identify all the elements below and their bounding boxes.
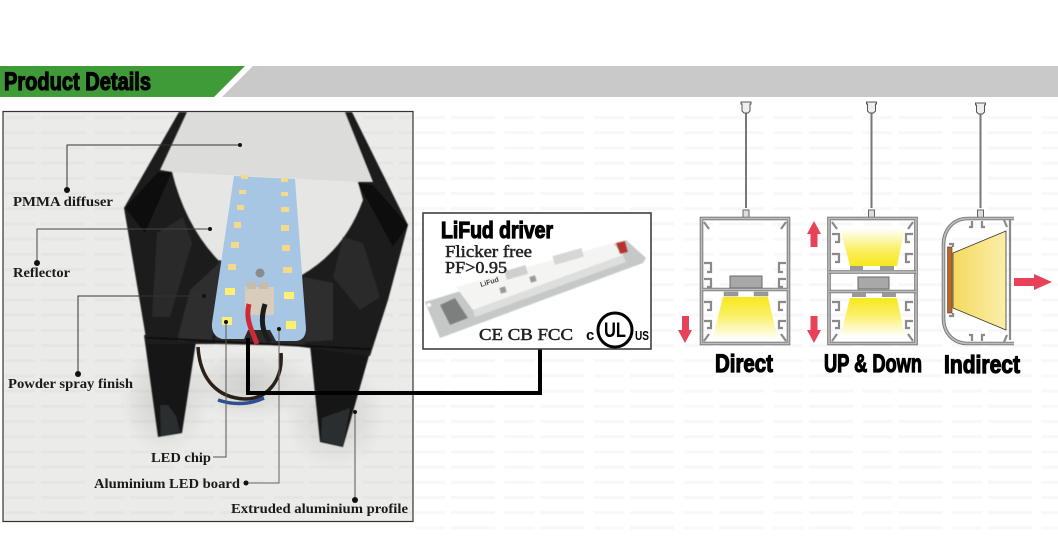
photo frame xyxy=(3,112,413,522)
LED chips xyxy=(222,175,296,329)
light beams xyxy=(840,228,905,266)
callout: PMMA diffuser xyxy=(13,143,242,209)
driver and LEDs xyxy=(858,277,889,289)
icon: pendant cable xyxy=(741,102,751,218)
callout: PMMA diffuser: PMMA diffuser xyxy=(13,194,113,209)
callout: Extruded aluminium profile: Extruded aluminium profile xyxy=(231,501,408,516)
callout: Powder spray finish xyxy=(8,294,206,391)
label: Direct xyxy=(715,350,774,378)
driver and LEDs xyxy=(730,276,762,288)
panel: LiFud driver xyxy=(423,213,651,349)
driver heading: LiFud driver xyxy=(441,217,553,243)
icon: UL mark xyxy=(586,313,649,347)
diagram: Indirect xyxy=(944,103,1052,379)
grey band xyxy=(222,66,1058,97)
diagram: Direct xyxy=(678,102,788,378)
cable loop xyxy=(198,347,281,399)
callout: Aluminium LED board: Aluminium LED board xyxy=(94,476,241,491)
LED board xyxy=(212,176,306,341)
photo background xyxy=(3,111,413,521)
label: Indirect xyxy=(944,351,1021,379)
callout: Reflector xyxy=(13,227,212,280)
profile cross-section xyxy=(829,218,916,344)
callout: Extruded aluminium profile xyxy=(231,410,408,516)
callout: Powder spray finish: Powder spray finish xyxy=(8,376,134,391)
arrow: down xyxy=(807,316,821,343)
arrow: right xyxy=(1014,274,1052,290)
icon: pendant cable xyxy=(976,103,986,218)
label: UP & Down xyxy=(824,350,922,378)
arrow: down xyxy=(678,316,692,343)
arrow: up xyxy=(807,221,821,247)
title: Product Details xyxy=(4,68,151,96)
panel: product photo with callouts xyxy=(3,111,413,522)
LED board xyxy=(948,247,952,313)
icon: UL mark: US xyxy=(635,328,649,343)
driver unit xyxy=(425,240,646,338)
callout: Aluminium LED board xyxy=(94,327,281,491)
header banner xyxy=(0,66,1058,97)
driver specs: Flicker free xyxy=(445,242,532,261)
light beam xyxy=(953,231,1006,330)
light beam xyxy=(712,297,778,340)
black aluminium profile body xyxy=(124,112,408,447)
connector and wires xyxy=(245,268,274,344)
panel: LiFud driver: PF>0.95 xyxy=(445,258,507,277)
connector line from board to driver xyxy=(248,338,540,393)
callout: Reflector: Reflector xyxy=(13,265,70,280)
icon: UL mark: c xyxy=(586,327,594,344)
callout: LED chip: LED chip xyxy=(151,450,211,465)
icon: pendant cable xyxy=(866,102,876,218)
green title band xyxy=(0,66,245,97)
small brand mark: LiFud xyxy=(480,277,500,289)
diagram: UP & Down xyxy=(807,102,922,378)
reflector xyxy=(172,172,363,275)
PMMA diffuser xyxy=(158,112,373,185)
icon: UL mark: UL xyxy=(604,319,626,342)
curved profile xyxy=(944,218,1014,344)
profile cross-section xyxy=(702,218,788,344)
callout: LED chip xyxy=(151,320,228,465)
certifications: CE CB FCC xyxy=(479,325,573,344)
